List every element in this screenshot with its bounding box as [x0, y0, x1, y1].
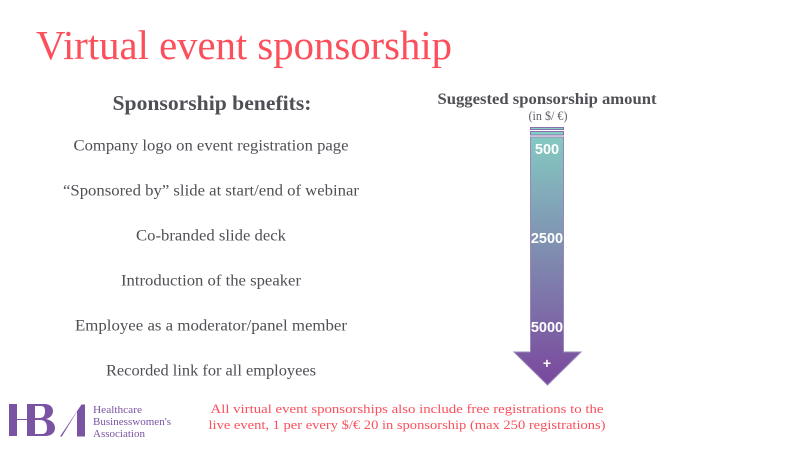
label: plus: + — [543, 355, 551, 371]
benefit: recorded link: Recorded link for all employees — [106, 362, 316, 380]
benefit: sponsored by slide: “Sponsored by” slide at start/end of webinar — [63, 182, 360, 200]
footnote: free registrations: All virtual event sponsorships also include free registrations to the — [210, 401, 604, 416]
logo mark — [9, 404, 85, 436]
footnote: free registrations: live event, 1 per every $/€ 20 in sponsorship (max 250 registrations) — [208, 417, 606, 432]
panel: sponsorship benefits — [63, 91, 360, 380]
heading: suggested sponsorship amount: Suggested sponsorship amount — [438, 91, 657, 108]
logo wordmark: Association — [93, 429, 146, 440]
subheading: currency: (in $/ €) — [528, 108, 568, 123]
logo: HBA — [9, 404, 171, 440]
benefit: company logo: Company logo on event registration page — [74, 138, 349, 154]
footnote: free registrations — [208, 401, 606, 432]
label: 2500: 2500 — [531, 231, 563, 247]
benefit: speaker introduction: Introduction of the speaker — [121, 272, 302, 290]
logo wordmark: Healthcare — [93, 405, 142, 416]
heading: sponsorship benefits: Sponsorship benefits: — [112, 91, 312, 115]
label: 5000: 5000 — [531, 320, 563, 336]
logo wordmark: Businesswomen's — [93, 417, 171, 428]
benefit: co-branded deck: Co-branded slide deck — [136, 228, 286, 244]
title: Virtual event sponsorship — [36, 22, 452, 68]
label: 500: 500 — [535, 142, 559, 158]
arrow: sponsorship scale — [514, 128, 581, 385]
benefit: moderator: Employee as a moderator/panel member — [75, 318, 348, 334]
logo wordmark — [93, 405, 171, 440]
